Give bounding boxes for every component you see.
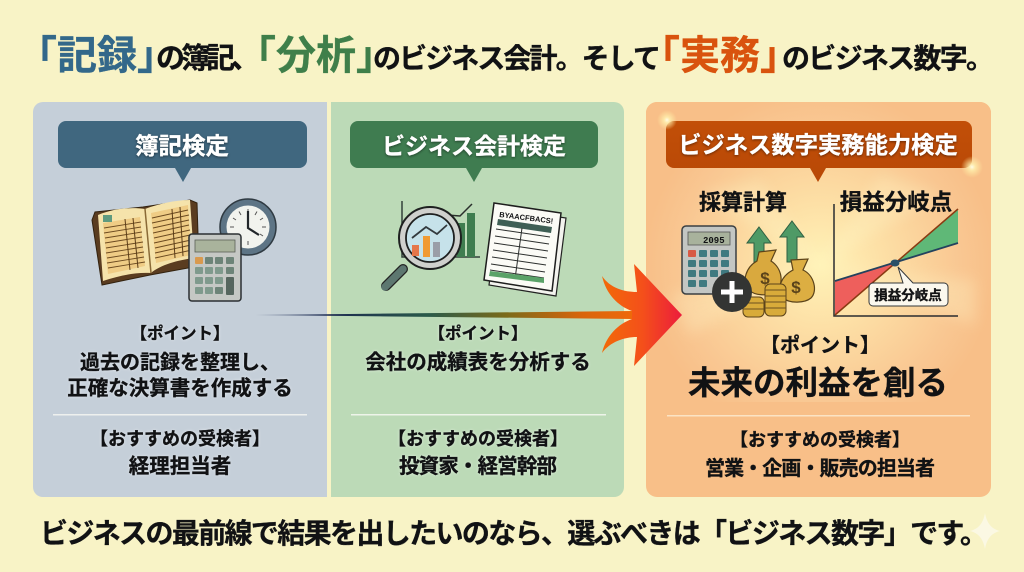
title: 「実務」 (640, 34, 800, 78)
recommended candidates: 【おすすめの受検者】 (730, 429, 910, 450)
icon: magnifier over chart (385, 201, 480, 287)
heading: ビジネス会計検定 (350, 121, 598, 182)
recommended candidates (388, 428, 568, 478)
recommended candidates: 経理担当者 (129, 455, 231, 478)
recommended candidates: 営業・企画・販売の担当者 (705, 457, 935, 480)
recommended candidates (705, 429, 935, 480)
point text: 会社の成績表を分析する (365, 350, 591, 374)
point text: 過去の記録を整理し、 (80, 351, 280, 374)
icon: calculator (189, 234, 241, 301)
point text (365, 323, 591, 374)
point text: 正確な決算書を作成する (67, 376, 293, 400)
title: の簿記、 (156, 42, 260, 75)
arrow (255, 264, 682, 366)
heading: ビジネス数字実務能力検定: ビジネス数字実務能力検定 (678, 132, 958, 158)
point text: 【ポイント】 (130, 323, 230, 343)
callout: 損益分岐点: 損益分岐点 (874, 287, 942, 303)
point text: 未来の利益を創る (688, 365, 948, 401)
point text: 【ポイント】 (760, 334, 880, 357)
recommended candidates (90, 428, 270, 478)
heading: ビジネス数字実務能力検定 (666, 121, 972, 182)
panel: ビジネス会計検定 (331, 102, 624, 497)
title: 「分析」 (236, 34, 396, 78)
heading: 採算計算: 採算計算 (699, 190, 787, 215)
icon: calculator with coins: $ (791, 278, 801, 297)
title (17, 34, 994, 78)
heading: 簿記検定 (58, 121, 307, 182)
icon: clock (220, 199, 276, 255)
panel: 簿記検定 (33, 102, 327, 497)
heading: 簿記検定: 簿記検定 (135, 133, 229, 159)
title: のビジネス数字。 (782, 43, 994, 74)
chart: break-even (834, 204, 958, 316)
icon: calculator with coins (682, 221, 814, 317)
closing message: ビジネスの最前線で結果を出したいのなら、選ぶべきは「ビジネス数字」です。 (40, 518, 988, 549)
icon: sparkle (970, 513, 1000, 549)
icon: financial statement (484, 203, 566, 296)
heading: ビジネス会計検定: ビジネス会計検定 (382, 133, 566, 159)
icon: open ledger (92, 200, 199, 285)
point text (67, 323, 293, 400)
panel: ビジネス数字実務能力検定 (646, 102, 991, 497)
point text: 【ポイント】 (428, 323, 528, 343)
heading: 損益分岐点: 損益分岐点 (840, 190, 952, 215)
point text (688, 334, 948, 401)
recommended candidates: 投資家・経営幹部 (399, 455, 557, 478)
icon: calculator with coins: 2095 (703, 236, 725, 246)
recommended candidates: 【おすすめの受検者】 (388, 428, 568, 449)
icon: financial statement: BYAACFBACS! (499, 210, 554, 226)
sparkles (657, 110, 983, 178)
recommended candidates: 【おすすめの受検者】 (90, 428, 270, 449)
icon: calculator with coins: $ (760, 269, 770, 288)
title: 「記録」 (17, 34, 177, 78)
title: のビジネス会計。そして (373, 43, 661, 74)
